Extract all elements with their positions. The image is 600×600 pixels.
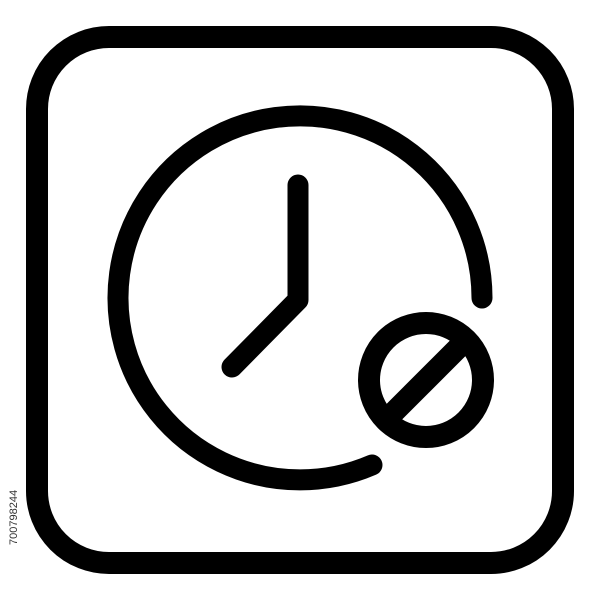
- stock id text: 700798244: [8, 490, 20, 545]
- clock hands: [232, 185, 298, 367]
- clock face arc: [118, 116, 482, 480]
- prohibition sign: [369, 323, 483, 437]
- icon frame: rounded square: [37, 37, 563, 563]
